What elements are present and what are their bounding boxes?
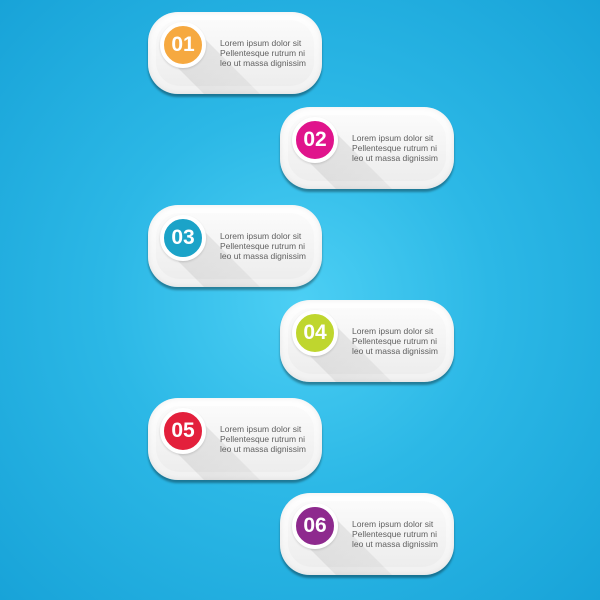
text 04: Pellentesque rutrum ni — [352, 336, 437, 346]
text 06: Pellentesque rutrum ni — [352, 529, 437, 539]
text 04: leo ut massa dignissim — [352, 346, 438, 356]
text 06 — [352, 519, 438, 549]
text 06: leo ut massa dignissim — [352, 539, 438, 549]
badge 02: 02 — [303, 128, 327, 151]
text 02: leo ut massa dignissim — [352, 153, 438, 163]
badge 06 — [292, 503, 338, 549]
badge 01: 01 — [171, 33, 195, 56]
text 04: Lorem ipsum dolor sit — [352, 326, 433, 336]
text 01: Lorem ipsum dolor sit — [220, 38, 301, 48]
text 01: leo ut massa dignissim — [220, 58, 306, 68]
badge 06: 06 — [303, 514, 327, 537]
text 04 — [352, 326, 438, 356]
card 02 — [280, 107, 454, 189]
text 03: Pellentesque rutrum ni — [220, 241, 305, 251]
badge 04 — [292, 310, 338, 356]
badge 01 — [160, 22, 206, 68]
text 06: Lorem ipsum dolor sit — [352, 519, 433, 529]
text 01: Pellentesque rutrum ni — [220, 48, 305, 58]
badge 03: 03 — [171, 226, 195, 249]
text 03: Lorem ipsum dolor sit — [220, 231, 301, 241]
card 05 — [148, 398, 322, 480]
card 04 — [280, 300, 454, 382]
text 02 — [352, 133, 438, 163]
badge 05 — [160, 408, 206, 454]
text 05: Lorem ipsum dolor sit — [220, 424, 301, 434]
text 05 — [220, 424, 306, 454]
text 05: Pellentesque rutrum ni — [220, 434, 305, 444]
card 06 — [280, 493, 454, 575]
text 02: Lorem ipsum dolor sit — [352, 133, 433, 143]
card 01 — [148, 12, 322, 94]
card 03 — [148, 205, 322, 287]
badge 02 — [292, 117, 338, 163]
badge 03 — [160, 215, 206, 261]
badge 05: 05 — [171, 419, 195, 442]
text 03 — [220, 231, 306, 261]
text 01 — [220, 38, 306, 68]
text 03: leo ut massa dignissim — [220, 251, 306, 261]
text 05: leo ut massa dignissim — [220, 444, 306, 454]
badge 04: 04 — [303, 321, 327, 344]
text 02: Pellentesque rutrum ni — [352, 143, 437, 153]
